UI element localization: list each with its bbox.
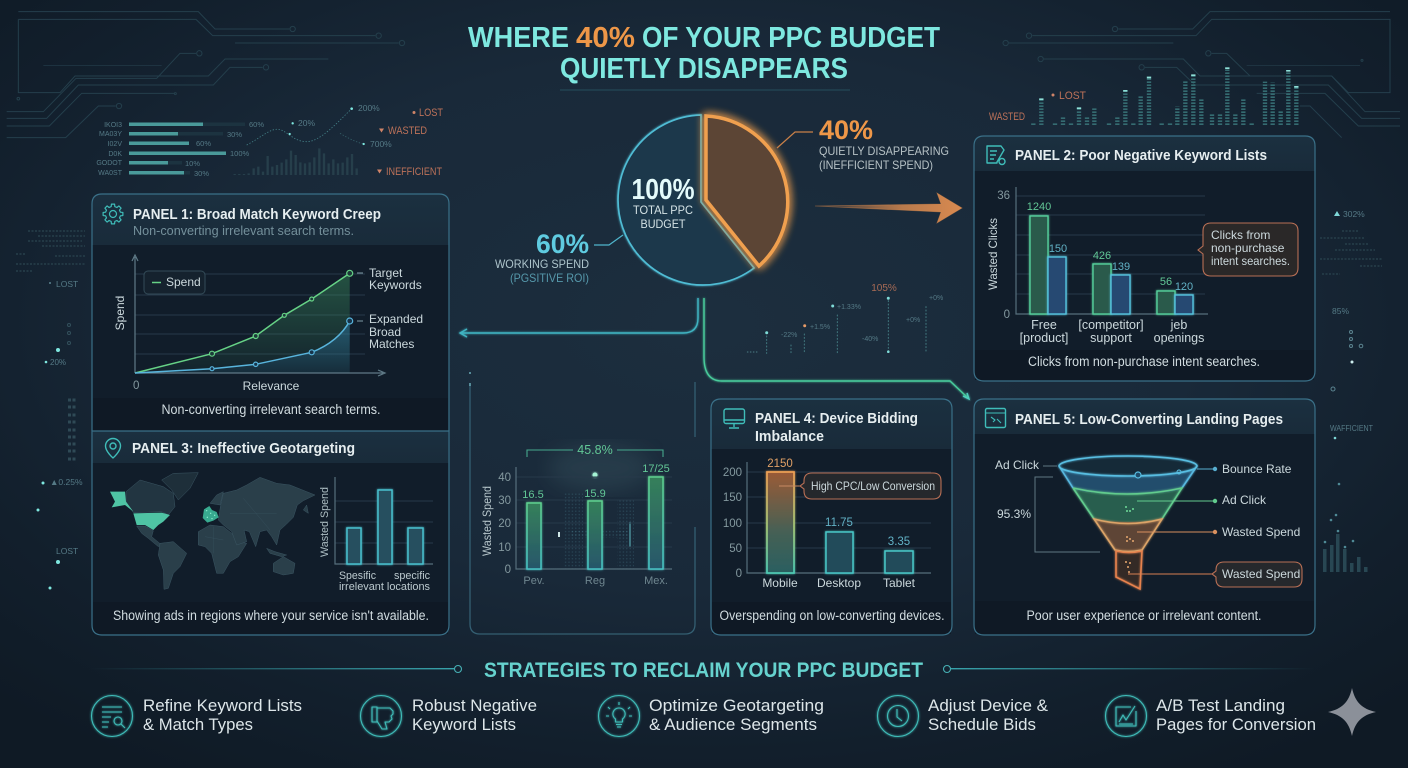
world map	[110, 473, 315, 589]
bar chart: wasted spend by location: Spesific	[339, 570, 376, 582]
bar chart: wasted spend: 40	[498, 472, 511, 484]
title: OF YOUR PPC BUDGET	[642, 22, 940, 54]
side decoration: left: 20%	[50, 358, 66, 367]
bar chart: wasted spend: 20	[498, 518, 511, 530]
callout: wasted spend: Wasted Spend	[1222, 567, 1300, 581]
strategy 1: refine keyword lists: Refine Keyword Lists	[143, 696, 302, 715]
side decoration: left: LOST	[56, 279, 78, 289]
circuit decoration: top left	[7, 12, 405, 138]
strategy 2: robust negative keyword lists: Keyword Lists	[412, 715, 516, 734]
strategy 1: refine keyword lists: & Match Types	[143, 715, 253, 734]
footer note: Clicks from non-purchase intent searches.	[1028, 354, 1260, 369]
strategy 4: adjust device and schedule bids: Schedule Bids	[928, 715, 1036, 734]
title: WHERE	[468, 22, 569, 54]
side decoration: right	[1320, 209, 1382, 572]
callout: 60% working spend: (PGSITIVE ROI)	[510, 271, 589, 285]
bar chart: wasted clicks: jeb	[1170, 318, 1187, 332]
bar chart: device spend: 0	[736, 568, 742, 580]
line chart: spend vs relevance: Keywords	[369, 278, 422, 292]
mini progress bars: top left	[96, 120, 264, 178]
panel 1: broad match keyword creep	[92, 194, 449, 431]
footer note: Showing ads in regions where your service isn't available.	[113, 608, 429, 623]
strategy 5: A/B test landing pages: A/B Test Landing	[1156, 696, 1285, 715]
callout: non-purchase clicks: non-purchase	[1211, 241, 1285, 255]
strategy 1: refine keyword lists	[92, 696, 302, 736]
bar chart: device spend: 50	[729, 543, 742, 555]
heading: PANEL 1: Broad Match Keyword Creep	[133, 206, 381, 223]
funnel diagram: 95.3%	[997, 507, 1031, 521]
loss labels: top right	[989, 90, 1086, 123]
mini dotted chart: center	[747, 283, 943, 353]
title: QUIETLY DISAPPEARS	[560, 53, 848, 85]
heading: PANEL 5: Low-Converting Landing Pages	[1015, 411, 1283, 428]
funnel diagram	[995, 456, 1300, 589]
strategy 5: A/B test landing pages: Pages for Conversion	[1156, 715, 1316, 734]
callout: 60% working spend: 60%	[536, 229, 589, 259]
bar chart: wasted spend: Wasted Spend	[480, 486, 494, 556]
bar chart: device spend: 100	[723, 518, 742, 530]
bar chart: wasted clicks: [competitor]	[1078, 318, 1144, 332]
icon: clock	[878, 696, 918, 736]
line chart: spend vs relevance: 0	[133, 380, 139, 392]
title	[468, 22, 940, 85]
mini progress bars: top left: MA03Y	[99, 131, 122, 138]
strategy 4: adjust device and schedule bids	[878, 696, 1049, 736]
line chart: spend vs relevance: Spend	[113, 296, 127, 330]
mini progress bars: top left: I02V	[108, 141, 122, 148]
bar chart: wasted clicks: Wasted Clicks	[986, 218, 1000, 290]
heading: PANEL 4: Device Bidding	[755, 410, 918, 427]
line chart: spend vs relevance: Spend	[166, 275, 201, 289]
funnel diagram: Bounce Rate	[1222, 462, 1292, 476]
mini dotted chart: center: 105%	[871, 283, 897, 294]
strategy 4: adjust device and schedule bids: Adjust Device &	[928, 696, 1049, 715]
mini progress bars: top left: 30%	[194, 169, 209, 178]
bar chart: device spend: 150	[723, 492, 742, 504]
bar chart: wasted clicks: 56	[1160, 276, 1172, 288]
bar chart: wasted spend: 17/25	[642, 463, 670, 475]
loss labels: top left: INEFFICIENT	[386, 166, 442, 178]
bar chart: device spend: 200	[723, 467, 742, 479]
bar chart: device spend: Tablet	[883, 576, 916, 590]
bar chart: device spend: 3.35	[888, 536, 910, 548]
side decoration: right: WAFFICIENT	[1330, 424, 1373, 433]
callout: 40% quietly disappearing: (INEFFICIENT SPEND)	[819, 158, 933, 172]
icon: light bulb	[598, 696, 640, 736]
slice: 60% working spend	[618, 115, 754, 285]
callout: 40% quietly disappearing	[777, 115, 949, 172]
mini progress bars: top left: IKOI3	[104, 122, 122, 129]
circuit decoration: top right	[1003, 12, 1400, 138]
mini progress bars: top left: WA0ST	[98, 170, 123, 177]
bar chart: wasted spend: 10	[498, 542, 511, 554]
callout: non-purchase clicks: Clicks from	[1211, 228, 1270, 242]
arrow: green line to panel 5	[704, 298, 969, 399]
icon: keyword list	[987, 146, 1005, 164]
bar chart: wasted spend	[480, 443, 672, 587]
mini dotted chart: center: -40%	[862, 336, 878, 343]
bar chart: device spend: Desktop	[817, 576, 861, 590]
bar chart: wasted spend: 45.8%	[577, 443, 613, 457]
callout: high CPC: High CPC/Low Conversion	[811, 479, 935, 493]
mini progress bars: top left: GODOT	[96, 160, 123, 167]
bar chart: wasted spend by location: Wasted Spend	[319, 487, 331, 557]
equalizer bars: top right	[1033, 67, 1296, 125]
sparkline and bars: top left: 200%	[358, 103, 380, 113]
bar chart: wasted clicks: Free	[1031, 318, 1057, 332]
bar chart: device spend: 11.75	[825, 517, 853, 529]
bar chart: wasted clicks: 36	[997, 190, 1010, 202]
icon: monitor	[724, 409, 744, 428]
mini progress bars: top left: 30%	[227, 130, 242, 139]
bar chart: wasted spend: 15.9	[584, 488, 606, 500]
bar chart: wasted clicks: 0	[1004, 309, 1010, 321]
callout: 60% working spend	[495, 229, 623, 285]
bar chart: wasted clicks: 120	[1175, 281, 1193, 293]
side decoration: left: ▲0.25%	[50, 477, 83, 487]
bar chart: wasted clicks: 150	[1049, 243, 1067, 255]
icon: chart in frame	[1106, 696, 1146, 736]
bar chart: wasted clicks: openings	[1154, 331, 1204, 345]
callout: non-purchase clicks: intent searches.	[1211, 254, 1290, 268]
side decoration: right: 302%	[1343, 209, 1365, 219]
arrow: orange to panel 2	[815, 193, 962, 223]
dim map backdrop	[548, 444, 652, 569]
bar chart: wasted spend: 16.5	[522, 489, 544, 501]
callout: non-purchase clicks	[1198, 223, 1298, 276]
subtitle: Non-converting irrelevant search terms.	[133, 223, 354, 238]
heading: PANEL 3: Ineffective Geotargeting	[132, 440, 355, 457]
line chart: spend vs relevance: Expanded	[369, 312, 423, 326]
bar chart: wasted clicks: 139	[1112, 261, 1130, 273]
bar chart: wasted spend: Pev.	[523, 575, 545, 587]
sparkline and bars: top left: 700%	[370, 139, 392, 149]
bar chart: device spend	[723, 458, 931, 590]
strategy 2: robust negative keyword lists: Robust Negative	[412, 696, 537, 715]
mini dotted chart: center: +0%	[929, 295, 943, 302]
icon: gear	[103, 204, 123, 224]
callout: 40% quietly disappearing: QUIETLY DISAPPEARING	[819, 144, 949, 158]
bar chart: wasted clicks	[986, 187, 1208, 345]
center label	[632, 174, 695, 231]
bar chart: wasted spend: 30	[498, 495, 511, 507]
center label: TOTAL PPC	[633, 203, 693, 217]
strategy 3: optimize geotargeting	[598, 696, 824, 736]
sparkline and bars: top left	[235, 103, 392, 175]
mini dotted chart: center: +1.5%	[810, 324, 830, 331]
bar chart: wasted clicks: 1240	[1027, 201, 1051, 213]
icon: map pin	[106, 438, 120, 458]
bar chart: wasted spend: Reg	[585, 575, 605, 587]
callout: 60% working spend: WORKING SPEND	[495, 257, 589, 271]
heading: Imbalance	[755, 428, 824, 445]
footer note: Poor user experience or irrelevant content.	[1026, 608, 1262, 623]
pie chart: budget split	[618, 115, 788, 285]
panel 3: ineffective geotargeting	[92, 431, 449, 635]
strategy 3: optimize geotargeting: Optimize Geotargeting	[649, 696, 824, 715]
strategy 2: robust negative keyword lists	[360, 696, 537, 736]
mini progress bars: top left: D0K	[108, 151, 122, 158]
icon: four-point star	[1328, 688, 1376, 736]
footer note: Non-converting irrelevant search terms.	[162, 402, 380, 417]
funnel diagram: Ad Click	[1222, 493, 1267, 507]
line chart: spend vs relevance: Broad	[369, 325, 401, 339]
bar chart: wasted spend: 0	[505, 564, 511, 576]
sparkline and bars: top left: 20%	[298, 118, 315, 128]
mini dotted chart: center: -22%	[781, 332, 797, 339]
callout: high CPC	[779, 473, 941, 499]
mini dotted chart: center: +1.33%	[837, 304, 861, 311]
bar chart: device spend: Mobile	[762, 576, 798, 590]
panel 4: device bidding imbalance	[711, 399, 952, 635]
bar chart: wasted clicks: [product]	[1020, 331, 1068, 345]
loss labels: top right: LOST	[1059, 90, 1086, 102]
side decoration: left	[16, 231, 85, 590]
heading	[755, 410, 918, 445]
bar chart: wasted spend by location	[319, 477, 433, 593]
mini progress bars: top left: 100%	[230, 149, 250, 158]
panel 2: poor negative keyword lists	[974, 136, 1315, 381]
line chart: spend vs relevance	[113, 255, 423, 393]
center label: 100%	[632, 174, 695, 206]
loss labels: top right: WASTED	[989, 111, 1025, 123]
arrow: working spend to panel 1	[460, 298, 698, 337]
loss labels: top left	[377, 107, 443, 178]
side decoration: right: 85%	[1332, 306, 1349, 316]
bar chart: wasted spend by location: specific	[394, 570, 430, 582]
bar chart: wasted clicks: 426	[1093, 250, 1111, 262]
funnel diagram: Wasted Spend	[1222, 525, 1300, 539]
icon: landing page	[986, 408, 1006, 428]
bar chart: wasted clicks: support	[1090, 331, 1132, 345]
line chart: spend vs relevance: Matches	[369, 337, 414, 351]
title: 40%	[576, 22, 635, 54]
heading: PANEL 2: Poor Negative Keyword Lists	[1015, 147, 1267, 164]
panel 5: low-converting landing pages	[974, 399, 1315, 635]
strategies heading	[90, 659, 1315, 682]
callout: wasted spend	[1212, 562, 1302, 587]
mini dotted chart: center: +0%	[906, 317, 920, 324]
line chart: spend vs relevance: Relevance	[243, 379, 300, 393]
strategies heading: STRATEGIES TO RECLAIM YOUR PPC BUDGET	[484, 659, 923, 682]
mini progress bars: top left: 10%	[185, 159, 200, 168]
loss labels: top left: WASTED	[388, 125, 427, 137]
icon: list with magnifier	[92, 696, 132, 736]
strategy 5: A/B test landing pages	[1106, 696, 1316, 736]
funnel diagram: Ad Click	[995, 458, 1040, 472]
bar chart: wasted spend: Mex.	[644, 575, 668, 587]
loss labels: top left: LOST	[419, 107, 443, 119]
side decoration: left: LOST	[56, 546, 78, 556]
line chart: spend vs relevance: Target	[369, 266, 403, 280]
bar chart: wasted spend by location: irrelevant locations	[339, 581, 430, 593]
mini progress bars: top left: 60%	[196, 139, 211, 148]
bar chart: device spend: 2150	[767, 458, 793, 470]
mini progress bars: top left: 60%	[249, 120, 264, 129]
icon: thumbs down	[360, 696, 402, 736]
callout: 40% quietly disappearing: 40%	[819, 115, 873, 145]
footer note: Overspending on low-converting devices.	[720, 608, 944, 623]
slice: 40% disappearing	[706, 116, 788, 266]
center label: BUDGET	[640, 217, 686, 231]
strategy 3: optimize geotargeting: & Audience Segments	[649, 715, 817, 734]
panel: regional wasted spend chart	[470, 372, 695, 634]
